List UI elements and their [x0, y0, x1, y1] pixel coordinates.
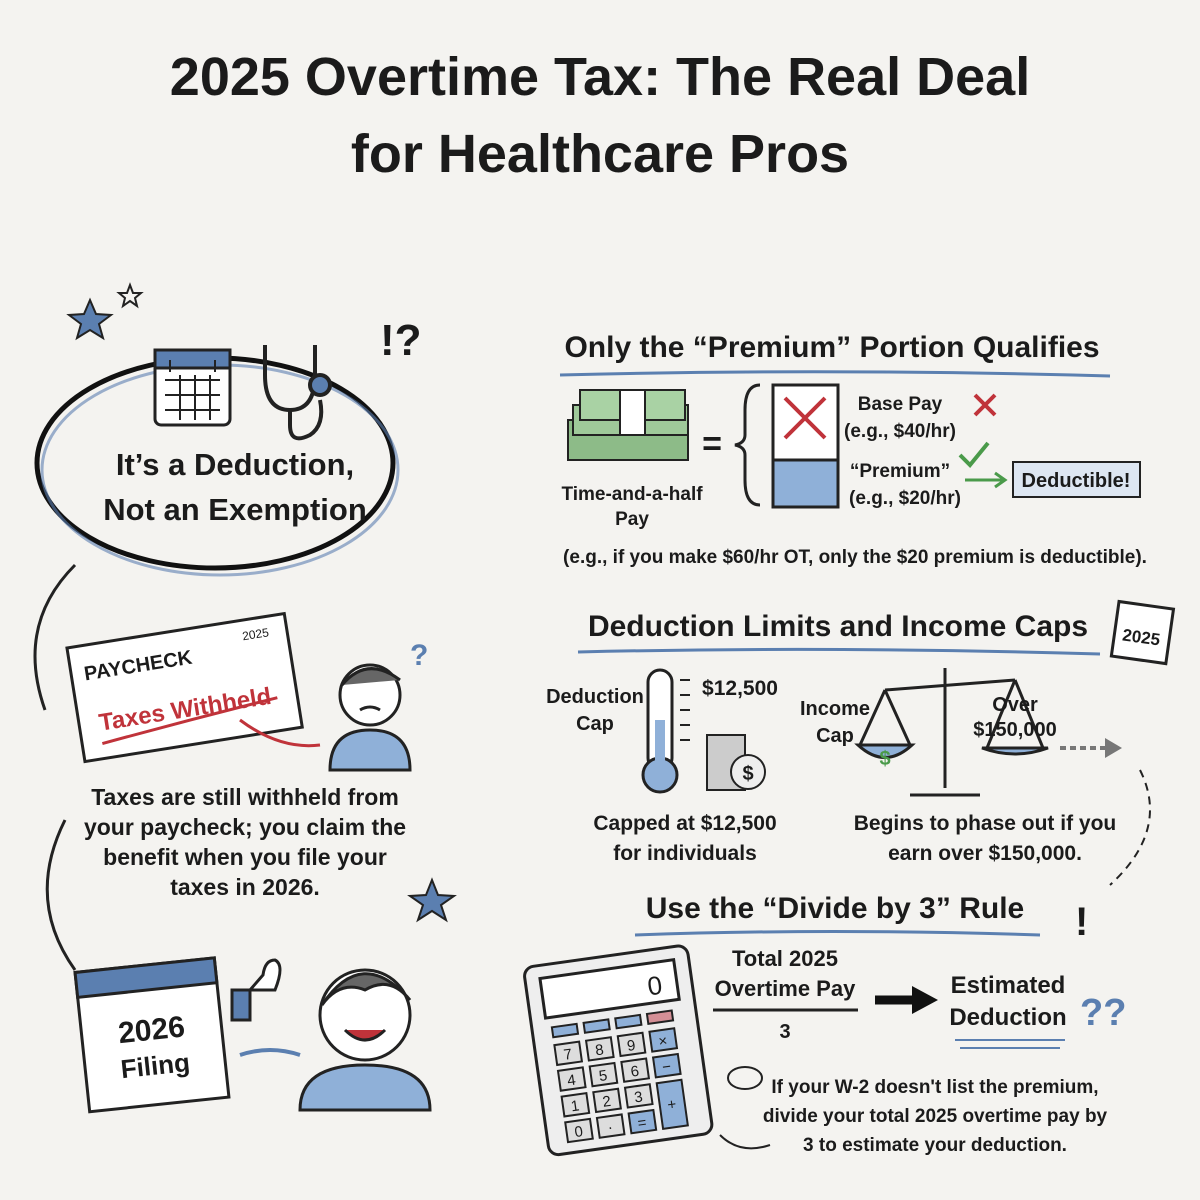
icon: thumbs up and happy person — [232, 960, 430, 1110]
panel: divide by 3: Deduction — [949, 1004, 1067, 1031]
calculator: − — [661, 1058, 672, 1076]
heading: It’s a Deduction, — [116, 447, 354, 482]
calculator: 1 — [570, 1097, 580, 1115]
calculator: 5 — [598, 1067, 608, 1085]
icon: 2026 filing calendar — [75, 958, 229, 1112]
panel: divide by 3: 3 — [779, 1021, 791, 1043]
panel: divide by 3: ?? — [1080, 992, 1126, 1034]
arrow: curved left — [35, 565, 75, 710]
panel: limits: Income — [800, 698, 870, 720]
labels: Base Pay — [858, 394, 943, 415]
calculator: 4 — [566, 1072, 577, 1090]
icon: paycheck: 2025 — [241, 625, 270, 643]
ellipse callout — [37, 358, 393, 568]
icon: money stack — [568, 390, 688, 460]
heading: Deduction Limits and Income Caps — [588, 610, 1088, 643]
heading: Only the “Premium” Portion Qualifies — [564, 331, 1100, 364]
calculator: 0 — [573, 1123, 584, 1141]
panel: limits — [546, 602, 1173, 885]
icon: 2026 filing calendar: Filing — [119, 1047, 191, 1084]
icon: calendar 2025: 2025 — [1121, 625, 1161, 649]
panel: limits: $12,500 — [702, 677, 778, 700]
box diagram — [773, 385, 838, 507]
panel: limits: $ — [879, 748, 891, 770]
panel: deduction not exemption — [37, 285, 422, 575]
icon: paycheck — [67, 614, 302, 762]
icon: stars — [69, 285, 141, 338]
icon: paycheck: PAYCHECK — [83, 647, 194, 685]
calculator: 0 — [646, 970, 664, 1001]
panel: limits: $ — [742, 763, 754, 785]
panel: limits: Capped at $12,500 — [593, 812, 777, 835]
title — [170, 47, 1030, 184]
text block: withheld: benefit when you file your — [103, 844, 387, 870]
scale — [858, 668, 1048, 795]
text: exclamation: !? — [380, 316, 422, 365]
panel: divide by 3: ! — [1075, 900, 1088, 944]
text block: If your W-2 doesn't list the premium, — [771, 1077, 1099, 1098]
text block: withheld: taxes in 2026. — [170, 874, 320, 900]
panel: divide by 3: Overtime Pay — [715, 976, 856, 1001]
panel: deduction not exemption: Not an Exemption — [103, 492, 367, 527]
calculator: = — [637, 1114, 648, 1132]
icon: paycheck: Taxes Withheld — [97, 683, 273, 737]
calculator — [523, 945, 713, 1156]
icon: calendar — [155, 350, 230, 425]
calculator: · — [607, 1119, 614, 1136]
label: Time-and-a-half — [561, 484, 703, 505]
thought bubble — [728, 1067, 762, 1089]
coins — [707, 735, 765, 790]
text block: withheld: your paycheck; you claim the — [84, 814, 406, 840]
text: ? — [410, 639, 428, 672]
icon: star — [410, 880, 454, 920]
icon: 2026 filing calendar: 2026 — [117, 1010, 186, 1050]
icon: stethoscope — [265, 345, 330, 438]
title: for Healthcare Pros — [351, 124, 849, 184]
panel: limits: Cap — [576, 713, 614, 735]
calculator: 6 — [630, 1063, 640, 1081]
panel: limits: Begins to phase out if you — [854, 812, 1116, 835]
panel: limits: Cap — [816, 725, 854, 747]
note: (e.g., if you make $60/hr OT, only the $20 premium is deductible). — [563, 547, 1147, 568]
arrow — [875, 996, 915, 1004]
badge: deductible: Deductible! — [1022, 470, 1130, 492]
panel: limits: Over — [992, 694, 1038, 716]
panel: limits: earn over $150,000. — [888, 842, 1082, 865]
calculator: × — [657, 1032, 668, 1051]
icon: calendar 2025 — [1111, 602, 1173, 664]
heading: Use the “Divide by 3” Rule — [646, 892, 1024, 925]
fraction: Total 2025 — [732, 946, 838, 971]
arrow: curved left 2 — [47, 820, 75, 970]
panel: limits: $150,000 — [973, 719, 1057, 741]
calculator: 3 — [633, 1088, 644, 1106]
title: 2025 Overtime Tax: The Real Deal — [170, 47, 1030, 107]
calculator: 8 — [594, 1041, 605, 1059]
calculator: 7 — [563, 1046, 573, 1064]
thermometer — [643, 670, 690, 792]
panel: divide by 3: divide your total 2025 overtime pay by — [763, 1106, 1108, 1127]
panel: premium portion: (e.g., $20/hr) — [849, 488, 961, 509]
panel: limits: Deduction — [546, 686, 644, 708]
icon: worried person — [330, 665, 410, 770]
calculator: 9 — [626, 1037, 637, 1055]
panel: premium portion: “Premium” — [850, 461, 950, 482]
panel: premium portion — [560, 331, 1147, 568]
text block: withheld — [84, 784, 406, 900]
calculator: 2 — [601, 1093, 612, 1111]
panel: premium portion: = — [702, 425, 722, 463]
panel: premium portion: (e.g., $40/hr) — [844, 421, 956, 442]
panel: divide by 3: Estimated — [951, 972, 1065, 999]
panel: divide by 3: 3 to estimate your deduction. — [803, 1135, 1067, 1156]
badge: deductible — [1013, 462, 1140, 497]
panel: limits: for individuals — [613, 842, 757, 865]
calculator: + — [666, 1096, 678, 1114]
panel: divide by 3 — [523, 892, 1126, 1156]
text block: withheld: Taxes are still withheld from — [91, 784, 399, 810]
panel: premium portion: Pay — [615, 509, 649, 530]
